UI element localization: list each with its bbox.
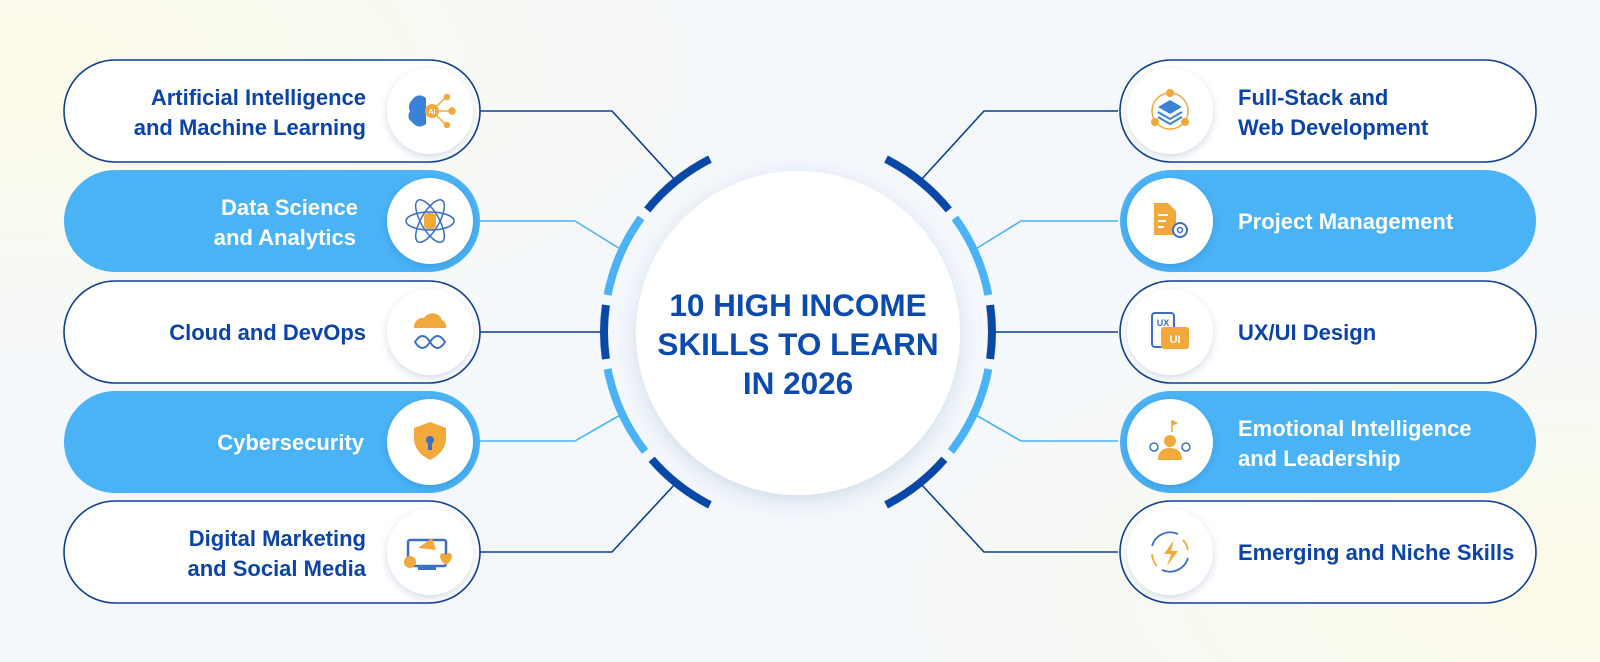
- icon: UX UI: UI: [1170, 334, 1180, 346]
- panel: Full-Stack: Full-Stack and: [1238, 85, 1388, 110]
- title: 10 HIGH INCOME: [669, 287, 927, 323]
- panel: Digital Marketing: Digital Marketing: [189, 526, 366, 551]
- connectors: [480, 111, 1118, 552]
- icon: lightning cycle: [1127, 509, 1213, 595]
- icon: UX UI: [1127, 289, 1213, 375]
- panel: Project Management: [1120, 170, 1536, 272]
- panel: Data Science: Data Science: [221, 195, 358, 220]
- panel: Cloud and DevOps: Cloud and DevOps: [169, 320, 366, 345]
- panel: Cloud and DevOps: [64, 281, 480, 383]
- icon: cloud infinity: [387, 289, 473, 375]
- panel: Full-Stack: Web Development: [1238, 115, 1429, 140]
- panel: Data Science: [64, 170, 480, 272]
- panel: UX/UI Design: UX/UI Design: [1238, 320, 1376, 345]
- title: SKILLS TO LEARN: [657, 326, 939, 362]
- center circle with title: [636, 171, 960, 495]
- panel: AI and ML: [64, 60, 480, 162]
- panel: Data Science: and Analytics: [214, 225, 356, 250]
- panel: AI and ML: and Machine Learning: [134, 115, 366, 140]
- panel: Cybersecurity: Cybersecurity: [217, 430, 365, 455]
- panel: AI and ML: Artificial Intelligence: [151, 85, 366, 110]
- title: [657, 287, 939, 401]
- panel: Cybersecurity: [64, 391, 480, 493]
- ring segments: [604, 159, 992, 505]
- icon: megaphone monitor: [387, 509, 473, 595]
- panel: Emotional Intelligence: [1120, 391, 1536, 493]
- icon: leader: [1127, 399, 1213, 485]
- panel: Emotional Intelligence: Emotional Intelligence: [1238, 416, 1471, 441]
- icon: layers: [1127, 68, 1213, 154]
- icon: atom database: [387, 178, 473, 264]
- icon: document gear: [1127, 178, 1213, 264]
- panel: Digital Marketing: [64, 501, 480, 603]
- panel: Project Management: Project Management: [1238, 209, 1454, 234]
- panel: Emerging Skills: [1120, 501, 1536, 603]
- panel: Digital Marketing: and Social Media: [188, 556, 367, 581]
- panel: Emotional Intelligence: and Leadership: [1238, 446, 1401, 471]
- panel: Emerging Skills: Emerging and Niche Skills: [1238, 540, 1514, 565]
- panel: UX/UI Design: [1120, 281, 1536, 383]
- title: IN 2026: [743, 365, 853, 401]
- icon: UX UI: UX: [1157, 318, 1169, 328]
- icon: shield: [387, 399, 473, 485]
- panel: Full-Stack: [1120, 60, 1536, 162]
- icon: AI brain: AI: [428, 109, 436, 116]
- icon: AI brain: [387, 68, 473, 154]
